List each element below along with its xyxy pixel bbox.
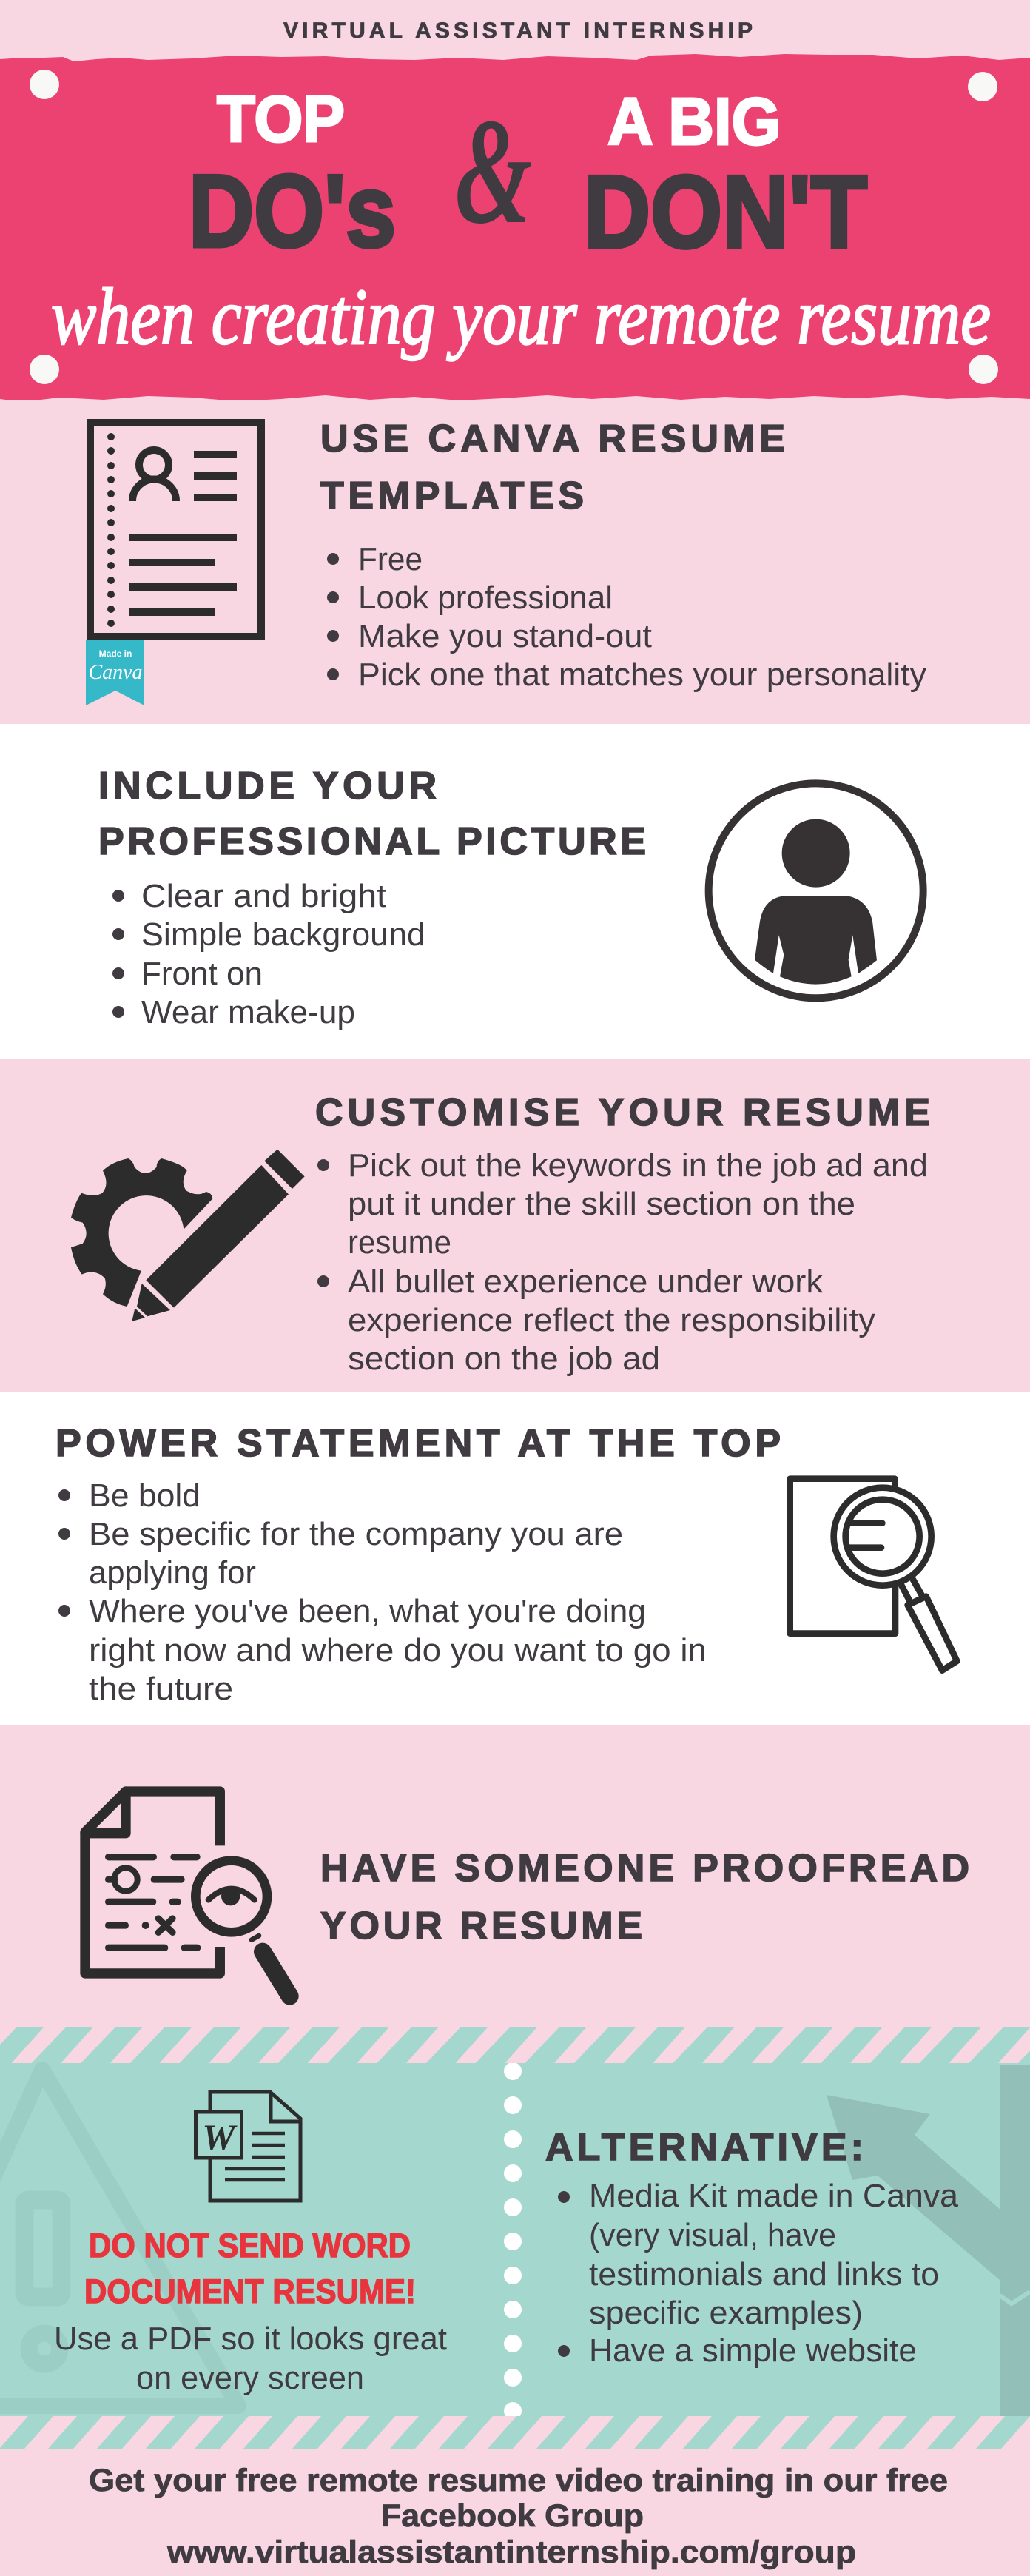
bullet list: alternative: specific examples) (589, 2295, 863, 2331)
footer call to action: Get your free remote resume video training in our free (89, 2463, 948, 2498)
bullet list: All bullet experience under work (348, 1264, 824, 1300)
corner dots (30, 70, 998, 384)
bullet list: right now and where do you want to go in (89, 1632, 707, 1668)
panel: title banner (0, 54, 1030, 402)
advice text: Use a PDF so it looks great (54, 2321, 447, 2357)
panel: proofread (0, 1725, 1030, 2027)
bullet list (327, 541, 926, 693)
icon: ghost warning triangle (0, 2070, 238, 2406)
bullet list: applying for (89, 1554, 256, 1591)
badge: made in canva: Made in (99, 648, 132, 659)
title: a big: A BIG (607, 85, 781, 159)
heading: INCLUDE YOUR (98, 765, 437, 808)
heading: HAVE SOMEONE PROOFREAD (320, 1847, 969, 1890)
bullet list: Pick one that matches your personality (358, 657, 926, 693)
panel: don't send word (0, 2027, 1030, 2449)
bullet list: Look professional (358, 580, 613, 616)
bullet list: put it under the skill section on the (348, 1186, 855, 1222)
bullet list: Front on (141, 956, 263, 992)
badge: made in canva (86, 640, 144, 705)
ampersand: & (455, 87, 532, 255)
title: don't: DON'T (584, 155, 867, 269)
divider: dotted line (504, 2062, 522, 2420)
icon: document and magnifier (790, 1479, 957, 1671)
bullet list: the future (89, 1671, 233, 1707)
bullet list: resume (348, 1224, 451, 1261)
heading: POWER STATEMENT AT THE TOP (55, 1422, 781, 1465)
panel: power statement (0, 1392, 1030, 1725)
icon: resume (90, 423, 261, 637)
icon: word document: W (202, 2116, 238, 2158)
bullet list: Free (358, 541, 423, 577)
footer call to action (89, 2463, 948, 2570)
heading (320, 1847, 969, 1948)
bullet list (58, 1477, 707, 1707)
bullet list: experience reflect the responsibility (348, 1302, 875, 1338)
bullet list: Simple background (141, 916, 425, 953)
panel: professional picture (0, 724, 1030, 1059)
heading: USE CANVA RESUME (320, 417, 785, 460)
top stripes (0, 2027, 1030, 2063)
icon: word document (195, 2092, 300, 2201)
warning text: DO NOT SEND WORD (89, 2227, 411, 2264)
bullet list: Clear and bright (141, 878, 386, 914)
bullet list: Be specific for the company you are (89, 1516, 623, 1552)
warning text: DOCUMENT RESUME! (84, 2273, 416, 2310)
icon: person in circle (709, 783, 923, 998)
bullet list: Be bold (89, 1477, 201, 1514)
bullet list: alternative: Have a simple website (589, 2332, 917, 2369)
heading: alternative: ALTERNATIVE: (545, 2126, 864, 2169)
bullet list: Pick out the keywords in the job ad and (348, 1147, 928, 1184)
top label: VIRTUAL ASSISTANT INTERNSHIP (283, 19, 753, 43)
icon: ghost arrow (827, 2065, 1030, 2418)
icon: reviewed document (85, 1791, 290, 1996)
warning text (84, 2227, 416, 2310)
heading: PROFESSIONAL PICTURE (98, 820, 646, 863)
bullet list: alternative (558, 2178, 959, 2369)
bullet list (112, 878, 425, 1030)
title: top: TOP (217, 82, 345, 155)
bullet list: Wear make-up (141, 994, 355, 1030)
bullet list: section on the job ad (348, 1341, 660, 1377)
heading (98, 765, 646, 863)
bullet list: alternative: (very visual, have (589, 2217, 836, 2253)
panel: canva templates (0, 400, 1030, 724)
icon: gear and pencil (71, 1150, 305, 1321)
footer call to action: Facebook Group (381, 2498, 644, 2534)
bullet list: Where you've been, what you're doing (89, 1593, 646, 1629)
heading: CUSTOMISE YOUR RESUME (315, 1091, 930, 1134)
bottom stripes (0, 2416, 1030, 2449)
title: do's: DO's (189, 154, 396, 269)
heading: YOUR RESUME (320, 1905, 642, 1948)
badge: made in canva: Canva (88, 661, 143, 684)
bullet list: Make you stand-out (358, 618, 652, 654)
bullet list: alternative: testimonials and links to (589, 2256, 939, 2292)
panel: customise resume (0, 1059, 1030, 1392)
advice text: on every screen (136, 2360, 364, 2396)
bullet list: alternative: Media Kit made in Canva (589, 2178, 959, 2214)
bullet list (317, 1147, 928, 1377)
heading (320, 417, 785, 517)
advice text (54, 2321, 447, 2396)
footer call to action: www.virtualassistantinternship.com/group (166, 2535, 856, 2570)
heading: TEMPLATES (320, 474, 584, 517)
